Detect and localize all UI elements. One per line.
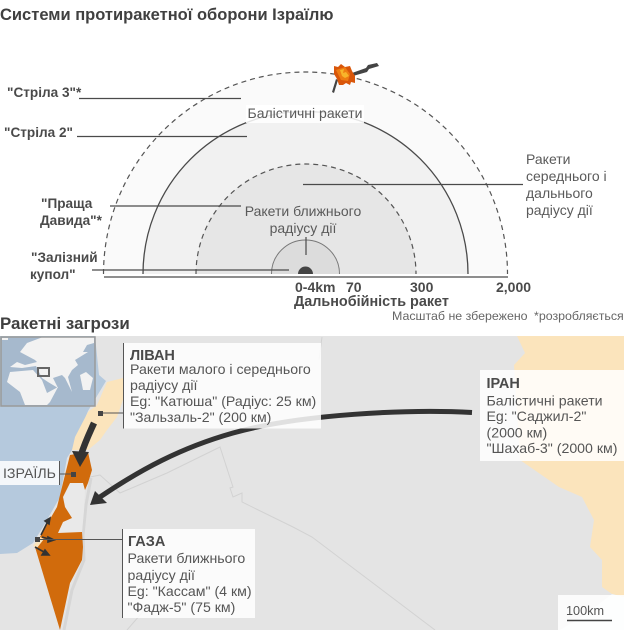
label: arrow 3: "Стріла 3"* xyxy=(7,85,82,100)
arrows: gaza launches xyxy=(35,518,54,555)
callout: lebanon: Eg: "Катюша" (Радіус: 25 км) xyxy=(130,393,316,409)
label: iron dome: "Залізний xyxy=(31,250,98,265)
callout: israel xyxy=(0,461,76,485)
label: david's sling: Давида"* xyxy=(40,213,103,228)
eurasia xyxy=(10,337,94,392)
callout: gaza: Ракети ближнього xyxy=(128,550,245,566)
outer dashed arc xyxy=(104,72,508,274)
scale bar: 100km xyxy=(566,604,604,618)
axis line xyxy=(104,276,508,278)
label: medium and long range missiles: дальнього xyxy=(526,185,593,201)
callout: iran: "Шахаб-3" (2000 км) xyxy=(486,440,617,456)
chart: missile defence range semicircles xyxy=(77,72,523,277)
footnote: *розробляється xyxy=(534,309,624,323)
callout: iran: (2000 км) xyxy=(486,424,547,440)
label: arrow 2: "Стріла 2" xyxy=(4,125,73,140)
scale bar xyxy=(558,595,624,630)
label: medium and long range missiles: радіусу дії xyxy=(526,202,593,218)
axis title: Дальнобійність ракет xyxy=(294,294,449,310)
label: david's sling: "Праща xyxy=(41,196,92,211)
arrow: lebanon to israel xyxy=(72,423,94,467)
israel territory xyxy=(35,452,92,630)
leader line: iron dome xyxy=(92,269,289,271)
leader line: arrow 2 xyxy=(77,136,247,138)
leader line: david's sling xyxy=(110,205,241,207)
jordan valley relief xyxy=(64,478,91,630)
axis labels: 2,000 xyxy=(496,279,531,295)
callout: iran: Балістичні ракети xyxy=(486,392,603,408)
axis labels xyxy=(295,279,531,295)
leader line: arrow 3 xyxy=(79,98,241,100)
map land background xyxy=(0,336,624,630)
callout: lebanon xyxy=(98,343,321,428)
callout: lebanon: Ракети малого і середнього xyxy=(130,361,311,377)
label: medium and long range missiles: середнього і xyxy=(526,168,607,184)
heading: missile threats: Ракетні загрози xyxy=(0,314,130,333)
label: short range missiles: Ракети ближнього xyxy=(245,203,361,219)
inner arc xyxy=(272,240,340,274)
axis labels: 0-4km xyxy=(295,279,335,295)
range zone: iron dome xyxy=(272,240,340,274)
axis labels: 300 xyxy=(410,279,434,295)
axis labels: 70 xyxy=(346,279,362,295)
leader line: medium and long range xyxy=(303,184,523,186)
africa xyxy=(7,370,58,405)
label: short range missiles: радіусу дії xyxy=(270,220,336,236)
callout: gaza: "Фадж-5" (75 км) xyxy=(128,599,235,615)
callout: gaza: ГАЗА xyxy=(128,534,166,550)
lebanon territory xyxy=(72,378,124,450)
sea xyxy=(0,336,106,554)
title: Системи протиракетної оборони Ізраїлю xyxy=(0,6,333,24)
centre dome xyxy=(298,267,313,274)
borders xyxy=(90,337,435,630)
callout: lebanon: радіусу дії xyxy=(130,377,197,393)
callout: israel: ІЗРАЇЛЬ xyxy=(3,465,56,481)
gulf water xyxy=(560,594,624,630)
callout: iran xyxy=(480,370,624,461)
iran territory xyxy=(514,336,624,597)
gaza territory xyxy=(33,537,44,548)
callout: gaza xyxy=(35,529,255,618)
label: ballistic missiles: Балістичні ракети xyxy=(248,105,362,121)
west bank xyxy=(58,483,85,533)
callout: gaza: Eg: "Кассам" (4 км) xyxy=(128,583,252,599)
third dashed arc xyxy=(196,164,416,274)
callout: iran: ІРАН xyxy=(486,376,520,392)
south-east asia xyxy=(80,372,93,390)
callout: lebanon: "Зальзаль-2" (200 км) xyxy=(130,409,271,425)
range zone: arrow 3 xyxy=(104,72,508,274)
footnote: Масштаб не збережено xyxy=(392,309,528,323)
arrow: iran to israel xyxy=(90,411,472,505)
label: medium and long range missiles: Ракети xyxy=(526,151,570,167)
callout: iran: Eg: "Саджил-2" xyxy=(486,408,586,424)
callout: lebanon: ЛІВАН xyxy=(130,348,175,364)
label: iron dome: купол" xyxy=(30,267,76,282)
leader tick: short range xyxy=(305,237,307,255)
map xyxy=(0,336,624,630)
range zone: arrow 2 xyxy=(143,112,468,274)
range zone: david's sling xyxy=(196,164,416,274)
inset locator map xyxy=(1,337,95,406)
icon: missile intercepted by explosion xyxy=(332,63,379,93)
second solid arc xyxy=(143,112,468,274)
callout: gaza: радіусу дії xyxy=(128,567,195,583)
arctic island xyxy=(2,338,8,340)
